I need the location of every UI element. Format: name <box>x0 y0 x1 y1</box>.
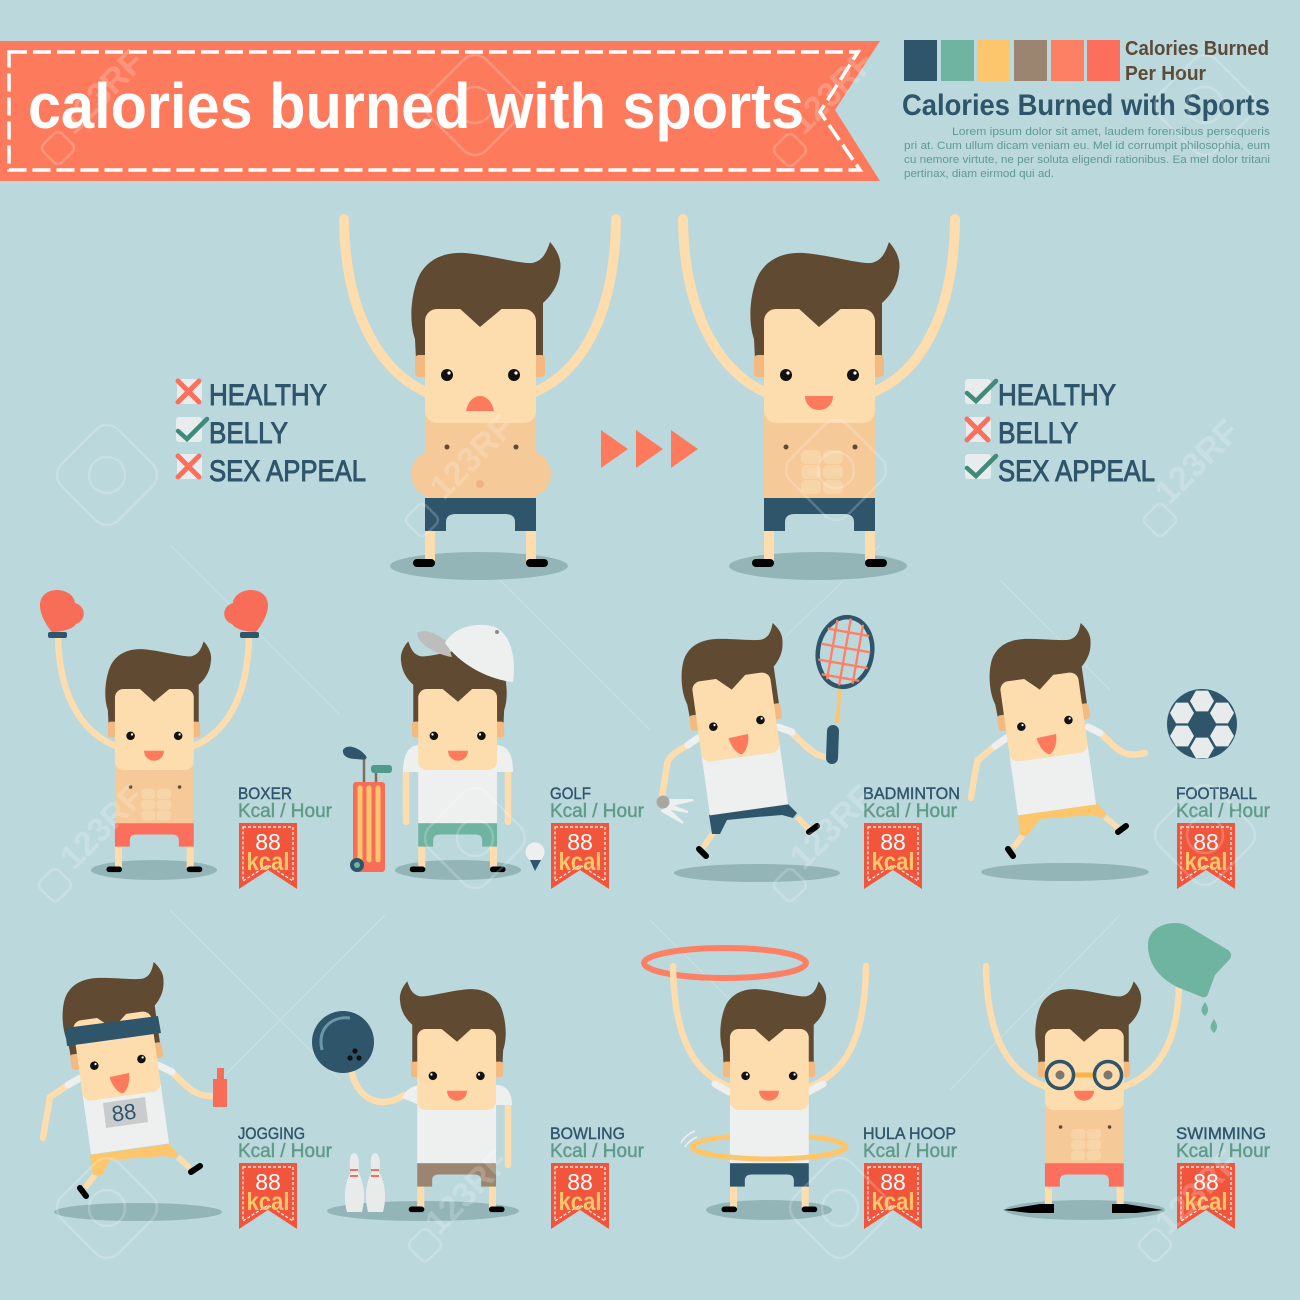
label: golf: Kcal / Hour <box>550 801 645 822</box>
label: football: Kcal / Hour <box>1176 801 1271 822</box>
checklist: before: BELLY <box>209 417 288 450</box>
label: boxer: kcal <box>246 848 290 876</box>
label: football: kcal <box>1184 848 1228 876</box>
label: hula hoop <box>863 1124 958 1229</box>
icon: golf bag <box>343 747 392 872</box>
icon: racket <box>812 613 878 758</box>
figure: swimming <box>986 923 1231 1220</box>
label: hula hoop: HULA HOOP <box>863 1124 956 1143</box>
watermark text: 123RF <box>1148 1143 1247 1242</box>
icon: soccer ball <box>1167 689 1237 759</box>
watermark text: 123RF <box>418 1143 517 1242</box>
label: swimming: kcal <box>1184 1188 1228 1216</box>
title banner <box>0 41 880 181</box>
icon: bottle <box>213 1068 227 1107</box>
icon: goggles <box>1046 1062 1122 1088</box>
checklist: after: SEX APPEAL <box>998 455 1155 488</box>
label: boxer <box>238 784 333 889</box>
intro paragraph: Lorem ipsum dolor sit amet, laudem forensibus persequeris <box>952 126 1271 138</box>
intro paragraph <box>904 126 1271 180</box>
label: badminton <box>863 784 960 889</box>
label: jogging <box>238 1124 333 1229</box>
figure: boxer <box>40 590 268 880</box>
icon: cap <box>417 625 514 682</box>
label: boxer: Kcal / Hour <box>238 801 333 822</box>
label: hula hoop: 88 <box>880 1169 906 1195</box>
label: golf: kcal <box>558 848 602 876</box>
icon: boxing gloves <box>40 590 268 638</box>
label: boxer: BOXER <box>238 784 292 803</box>
icon: headband <box>65 1016 161 1046</box>
label: bowling: Kcal / Hour <box>550 1141 645 1162</box>
label: football <box>1176 784 1271 889</box>
watermark text: 123RF <box>783 43 882 142</box>
checklist: after: BELLY <box>998 417 1078 450</box>
label: swimming <box>1176 1124 1271 1229</box>
icon: golf ball on tee <box>526 842 544 871</box>
label: golf: 88 <box>567 829 593 855</box>
watermark text: 123RF <box>53 43 152 142</box>
figure: hula hoop <box>644 948 866 1220</box>
watermark lattice <box>170 545 1120 1090</box>
label: jogging: Kcal / Hour <box>238 1141 333 1162</box>
label: bowling: BOWLING <box>550 1124 625 1143</box>
watermark text: 123RF <box>423 408 522 507</box>
label: boxer: 88 <box>255 829 281 855</box>
intro paragraph: pri at. Cum ullum dicam veniam eu. Mel id corrumpit philosophia, eum <box>904 140 1270 152</box>
label: swimming: SWIMMING <box>1176 1124 1266 1143</box>
figure: football <box>971 622 1237 881</box>
label: badminton: BADMINTON <box>863 784 960 803</box>
icon: motion lines <box>681 1131 697 1147</box>
secondary heading: Calories Burned with Sports <box>902 89 1270 122</box>
icon: hoop overhead <box>644 948 806 978</box>
checklist: after <box>965 379 1155 488</box>
figure: after, fit man <box>683 219 955 580</box>
label: badminton: 88 <box>880 829 906 855</box>
label: swimming: Kcal / Hour <box>1176 1141 1271 1162</box>
checklist: before: SEX APPEAL <box>209 455 366 488</box>
label: golf: GOLF <box>550 784 591 803</box>
colour palette legend: Per Hour <box>1125 63 1206 85</box>
checklist: before <box>176 379 366 488</box>
title: calories burned with sports <box>28 70 804 142</box>
label: golf <box>550 784 645 889</box>
icon: shuttlecock <box>656 796 693 823</box>
watermark text: 123RF <box>783 778 882 877</box>
race bib <box>103 1097 148 1128</box>
icon: swim flipper <box>1148 923 1231 1033</box>
label: bowling <box>550 1124 645 1229</box>
figure: jogging <box>43 961 227 1221</box>
checklist: before: HEALTHY <box>209 379 327 412</box>
watermark text: 123RF <box>1148 413 1247 512</box>
icon: hoop at waist, front arc <box>692 1147 846 1159</box>
colour palette legend <box>904 38 1269 85</box>
label: bowling: kcal <box>558 1188 602 1216</box>
figure: bowling <box>312 981 519 1221</box>
colour palette legend: Calories Burned <box>1125 38 1269 60</box>
intro paragraph: cu nemore virtute, ne per soluta eligendi rationibus. Ea mel dolor tritani <box>904 154 1270 166</box>
label: football: 88 <box>1193 829 1219 855</box>
label: swimming: 88 <box>1193 1169 1219 1195</box>
race bib: 88 <box>110 1098 138 1127</box>
watermark text: 123RF <box>53 778 152 877</box>
figure: badminton <box>656 613 878 882</box>
label: jogging: kcal <box>246 1188 290 1216</box>
icon: bowling ball <box>312 1011 374 1073</box>
label: badminton: Kcal / Hour <box>863 801 958 822</box>
label: hula hoop: Kcal / Hour <box>863 1141 958 1162</box>
arrows <box>601 430 698 468</box>
label: hula hoop: kcal <box>872 1188 914 1216</box>
icon: bowling pins <box>345 1153 385 1212</box>
label: bowling: 88 <box>567 1169 593 1195</box>
label: jogging: 88 <box>255 1169 281 1195</box>
figure: before, overweight man <box>344 219 616 580</box>
icon: flippers <box>1003 1204 1163 1213</box>
checklist: after: HEALTHY <box>998 379 1116 412</box>
intro paragraph: pertinax, diam eirmod qui ad. <box>904 168 1054 180</box>
label: football: FOOTBALL <box>1176 784 1257 803</box>
label: badminton: kcal <box>872 848 914 876</box>
label: jogging: JOGGING <box>238 1124 305 1143</box>
figure: golfer <box>343 625 544 880</box>
